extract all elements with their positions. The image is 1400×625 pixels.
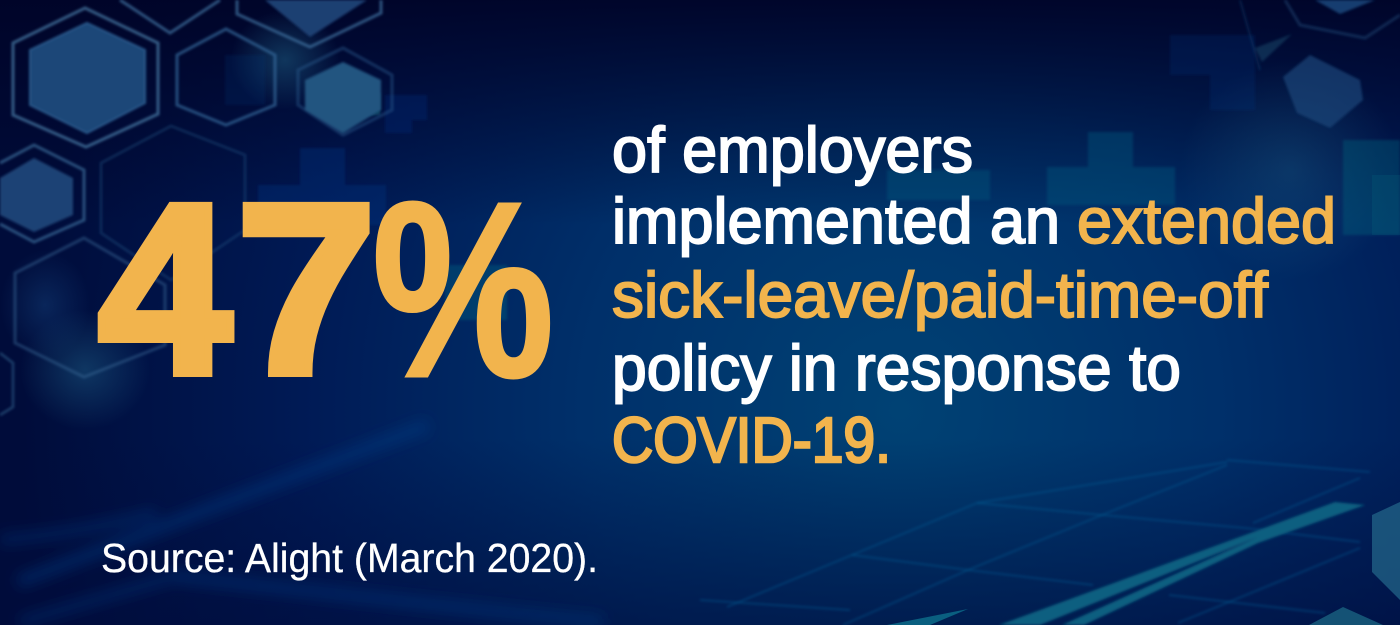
big statistic: 47% xyxy=(98,151,554,430)
line: implemented an: implemented an xyxy=(612,185,1060,257)
line: extended: extended xyxy=(1077,185,1336,257)
line: of employers: of employers xyxy=(612,114,973,186)
statement text xyxy=(612,114,1336,476)
background: perspective grid and streaks xyxy=(700,460,1370,625)
background: teal light streaks xyxy=(887,502,1400,625)
background: soft curves lower left xyxy=(0,425,603,622)
background: hexagons, left cluster xyxy=(0,0,392,415)
big statistic: 47%: 4 xyxy=(98,154,232,425)
line: COVID-19.: COVID-19. xyxy=(612,404,891,476)
big statistic: 47%: 7 xyxy=(236,153,377,425)
source note: Source: Alight (March 2020). xyxy=(101,535,598,581)
background: hexagons, top right xyxy=(1240,0,1400,128)
line: policy in response to: policy in response to xyxy=(612,332,1181,404)
line: sick-leave/paid-time-off: sick-leave/paid-time-off xyxy=(612,259,1268,331)
background: plus shapes xyxy=(225,35,1400,320)
big statistic: 47%: % xyxy=(372,151,554,430)
